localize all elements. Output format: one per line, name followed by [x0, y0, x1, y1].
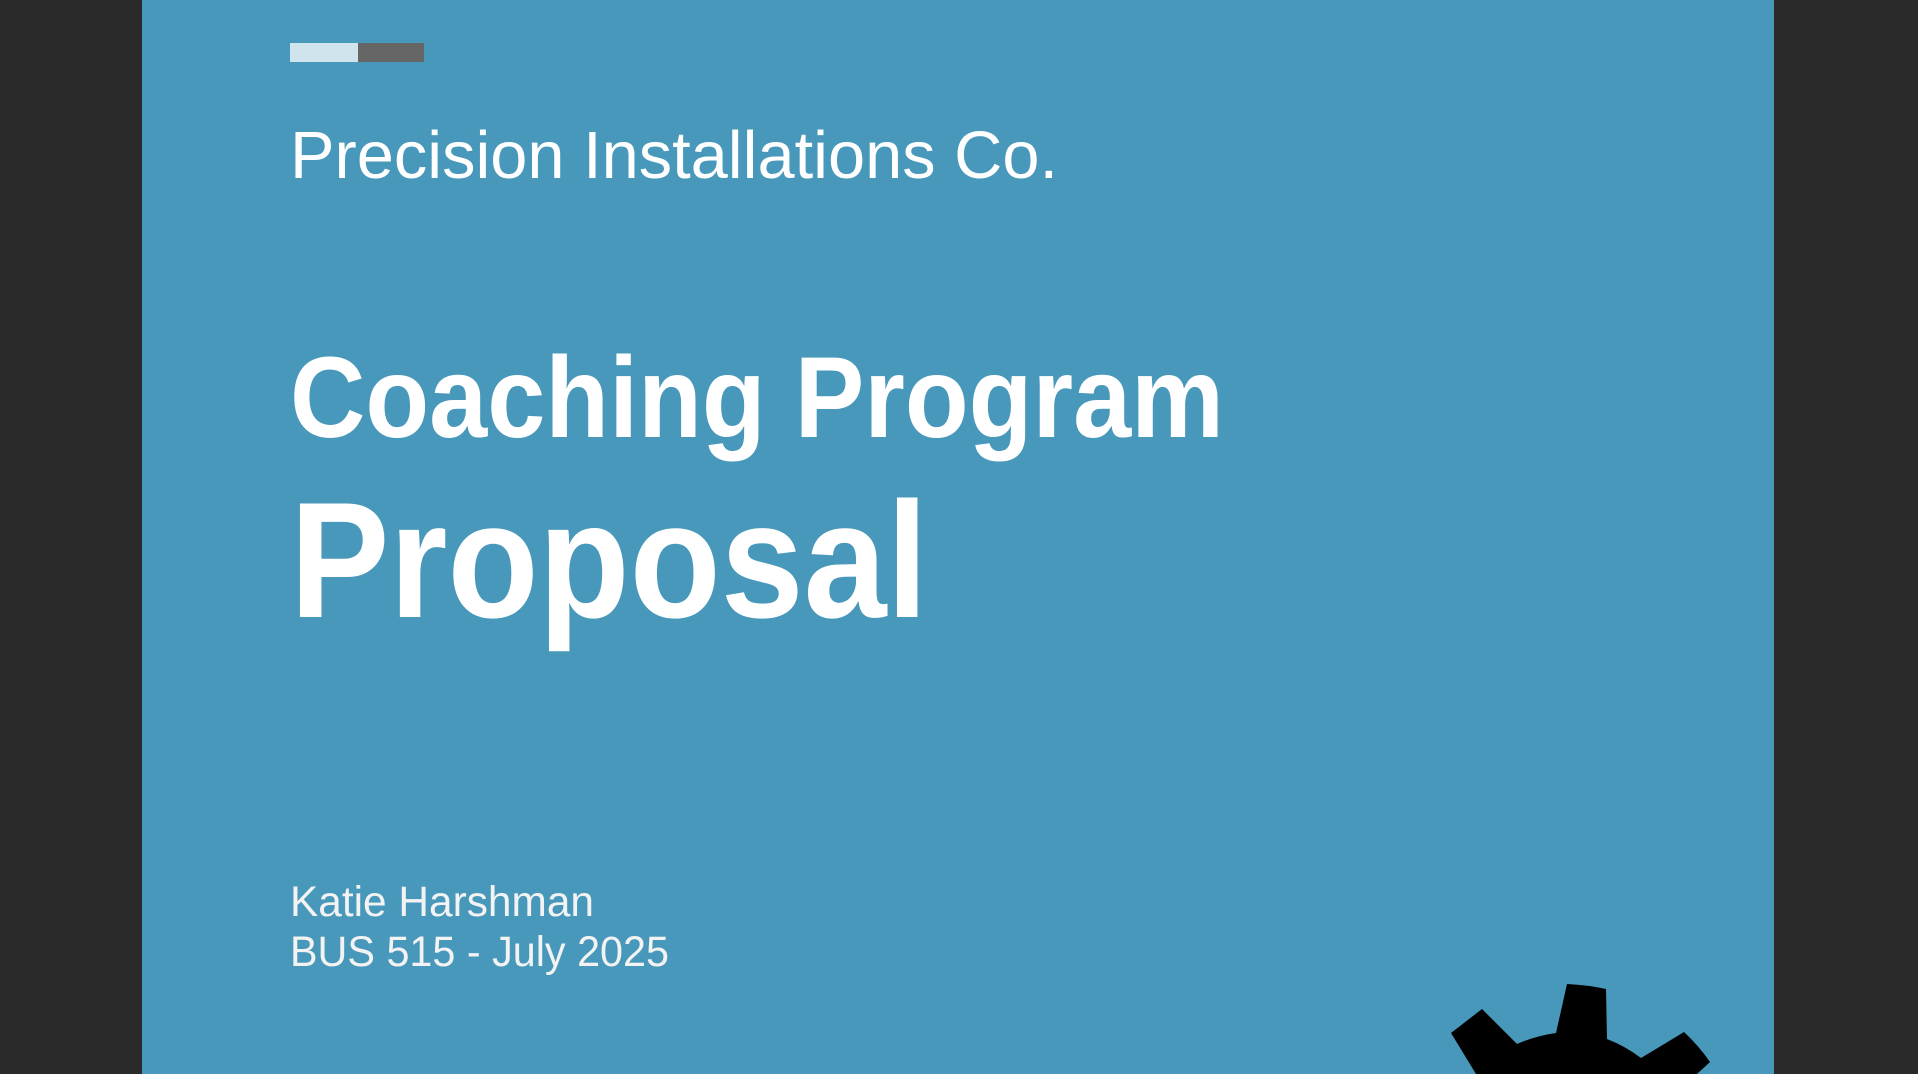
icon: gear — [1451, 984, 1710, 1074]
course and date: BUS 515 - July 2025 — [290, 928, 669, 976]
title line: Coaching Program: Coaching Program — [290, 334, 1224, 462]
title line: Proposal: Proposal — [290, 468, 928, 652]
author: Katie Harshman — [290, 878, 594, 926]
accent bar — [290, 43, 424, 62]
company name: Precision Installations Co. — [290, 118, 1058, 193]
